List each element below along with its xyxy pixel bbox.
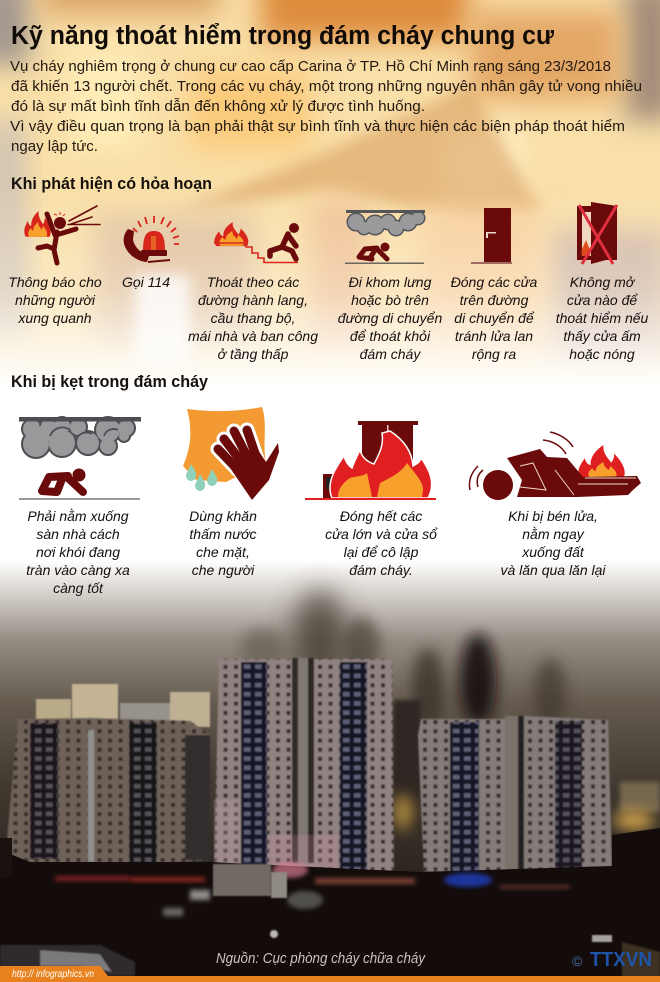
icon: wet towel and hand: [183, 407, 279, 500]
caption: trên đường: [460, 292, 529, 308]
caption: hoặc nóng: [569, 346, 635, 362]
intro text: Vụ cháy nghiêm trọng ở chung cư cao cấp Carina ở TP. Hồ Chí Minh rạng sáng 23/3/2018: [10, 58, 611, 75]
caption: đường hành lang,: [198, 292, 308, 308]
caption: Không mở: [570, 274, 636, 290]
caption: rộng ra: [472, 346, 516, 362]
caption: di chuyển để: [454, 310, 535, 326]
icon: lie low under smoke: [19, 417, 141, 500]
caption: xung quanh: [17, 310, 92, 326]
caption: [556, 274, 649, 362]
caption: [338, 274, 442, 362]
far buildings: [36, 684, 210, 727]
source: Nguồn: Cục phòng cháy chữa cháy: [216, 950, 426, 967]
caption: cửa lớn và cửa sổ: [325, 526, 438, 542]
right building: [418, 716, 612, 872]
caption: Thoát theo các: [207, 274, 299, 290]
logo: TTXVN: TTXVN: [590, 949, 652, 971]
caption: Thông báo cho: [8, 274, 102, 290]
footer bar: http:// infographics.vn: [12, 969, 94, 980]
intro text: đó là sự mất bình tĩnh dẫn đến không xử lý được tình huống.: [11, 98, 425, 115]
caption: thoát hiểm nếu: [556, 310, 649, 326]
centre building: [214, 658, 394, 875]
caption: hoặc bò trên: [351, 292, 429, 308]
caption: Đóng hết các: [340, 508, 422, 524]
caption: đường di chuyển: [338, 310, 442, 326]
caption: [189, 508, 257, 578]
caption: cầu thang bộ,: [211, 310, 295, 326]
caption: thấm nước: [189, 526, 257, 542]
caption: nằm ngay: [522, 526, 585, 542]
heading: when trapped: Khi bị kẹt trong đám cháy: [11, 372, 209, 391]
caption: Gọi 114: [122, 274, 170, 290]
caption: che mặt,: [196, 544, 250, 560]
heading: when fire detected: Khi phát hiện có hỏa hoạn: [11, 174, 212, 193]
footer bar: [0, 966, 660, 982]
icon: stop drop roll: [469, 432, 641, 500]
icon: call 114: [124, 216, 179, 262]
caption: [325, 508, 438, 578]
ground with lights: [0, 828, 660, 982]
icon: do not open door: [577, 202, 617, 264]
intro text: ngay lập tức.: [11, 138, 98, 155]
caption: Đi khom lưng: [349, 274, 432, 290]
caption: Khi bị bén lửa,: [508, 508, 598, 524]
caption: mái nhà và ban công: [188, 328, 318, 344]
background: night building photo: [0, 560, 660, 982]
intro text: [10, 58, 642, 155]
caption: Phải nằm xuống: [27, 508, 129, 524]
caption: thấy cửa ấm: [563, 328, 641, 344]
caption: Dùng khăn: [189, 508, 257, 524]
caption: [8, 274, 102, 326]
caption: xuống đất: [521, 544, 585, 560]
caption: và lăn qua lăn lại: [500, 562, 606, 578]
caption: [500, 508, 606, 578]
caption: đám cháy.: [349, 562, 413, 578]
caption: tràn vào càng xa: [26, 562, 130, 578]
icon: alert people: [24, 206, 100, 263]
caption: cửa nào để: [567, 292, 638, 308]
intro text: đã khiến 13 người chết. Trong các vụ cháy, một trong những nguyên nhân gây tử vong nhiều: [11, 78, 642, 95]
caption: [451, 274, 538, 362]
caption: che người: [192, 562, 255, 578]
caption: [26, 508, 130, 596]
caption: để thoát khỏi: [350, 328, 431, 344]
icon: close windows fire: [305, 421, 436, 500]
title: Kỹ năng thoát hiểm trong đám cháy chung cư: [11, 22, 555, 50]
icon: escape via stairs: [214, 222, 299, 262]
icon: crawl under smoke: [345, 210, 425, 264]
caption: [188, 274, 318, 362]
caption: những người: [15, 292, 96, 308]
caption: nơi khói đang: [36, 544, 120, 560]
caption: đám cháy: [360, 346, 421, 362]
logo: TTXVN: ©: [572, 953, 583, 969]
caption: tránh lửa lan: [455, 328, 533, 344]
background: fire photo: [0, 0, 660, 568]
caption: ở tầng thấp: [218, 346, 289, 362]
caption: sàn nhà cách: [36, 526, 120, 542]
intro text: Vì vậy điều quan trọng là bạn phải thật sự bình tĩnh và thực hiện các biện pháp thoát hiểm: [10, 118, 625, 135]
caption: càng tốt: [53, 580, 104, 596]
caption: lại để cô lập: [344, 544, 419, 560]
left building: [6, 718, 210, 868]
icon: closed door: [471, 208, 512, 264]
caption: Đóng các cửa: [451, 274, 538, 290]
